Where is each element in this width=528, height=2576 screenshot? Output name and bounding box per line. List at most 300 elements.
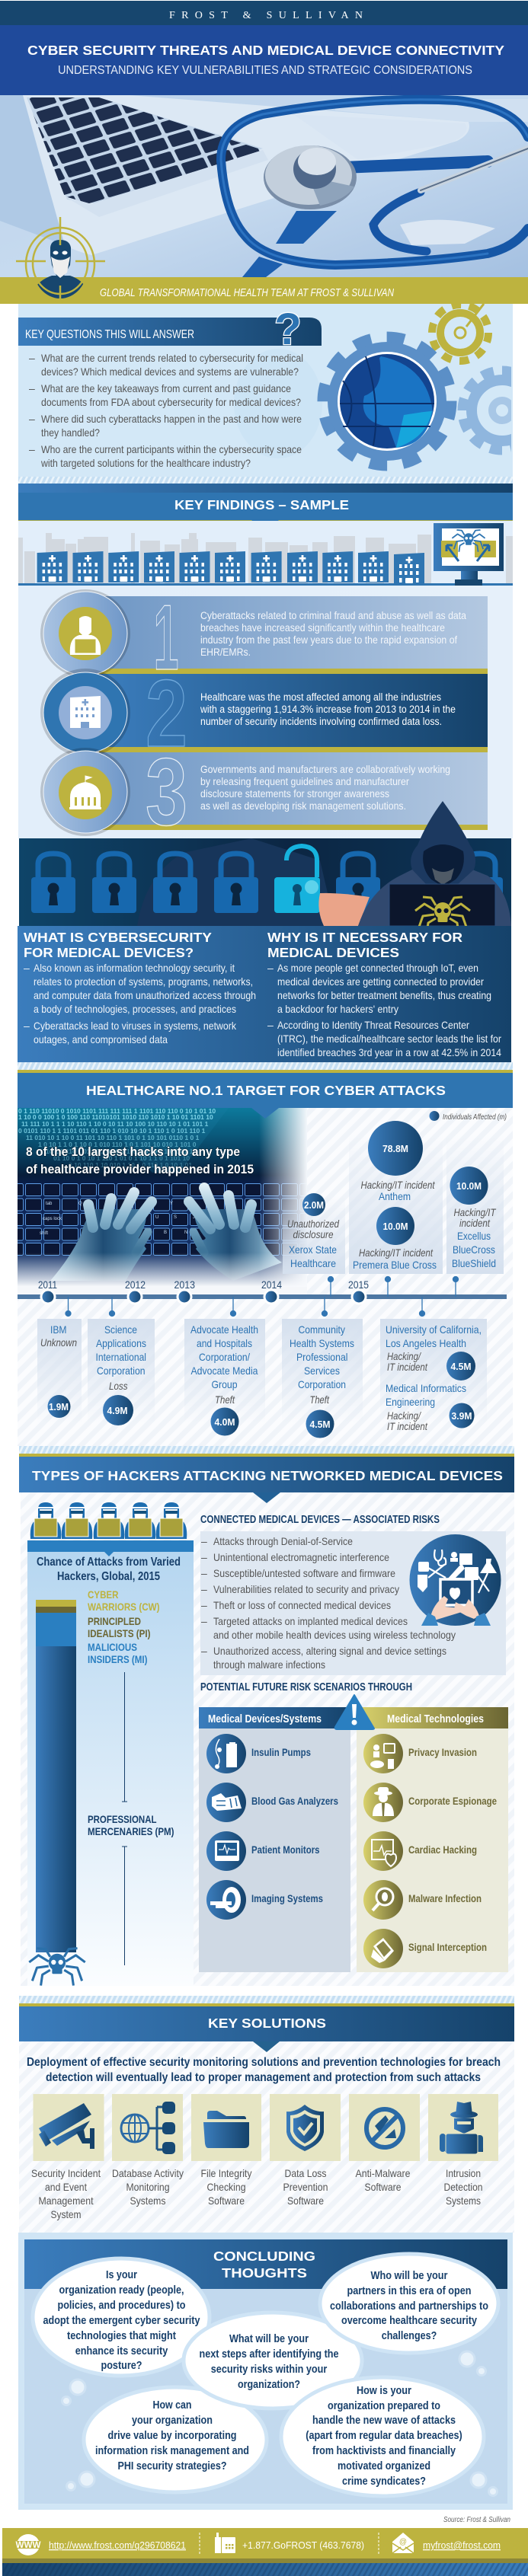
thought: how can your organization: How can bbox=[152, 2399, 192, 2412]
thought: new wave of attacks: crime syndicates? bbox=[342, 2475, 426, 2488]
icon: faint speech bubble bbox=[234, 349, 322, 458]
callout: largest hacks bbox=[26, 1144, 254, 1176]
finding 3: as well as developing risk management solutions. bbox=[200, 800, 406, 812]
breach: Advocate: Theft bbox=[215, 1393, 235, 1406]
binary digits: 0 10 110 1 10 010 1 10 1 0 110 1 0 10 1 01 bbox=[69, 1161, 192, 1169]
finger bbox=[318, 893, 370, 926]
breach: IBM: 1.9M bbox=[49, 1401, 69, 1412]
icon: warning triangle bbox=[335, 1695, 374, 1729]
binary digits: 1 10 0 0 100 1 0 100 110 11010101 1010 110 1010 1 10 01 1101 10 bbox=[18, 1113, 213, 1121]
photo: hands on keyboard: B bbox=[164, 1231, 167, 1235]
link: email: myfrost@frost.com bbox=[423, 2539, 501, 2551]
breach: Science Applications: Applications bbox=[96, 1337, 146, 1349]
panel: risks list: Targeted attacks on implanted medical devices bbox=[213, 1615, 408, 1627]
breach column: Xerox: disclosure bbox=[293, 1228, 334, 1240]
caption: Intrusion bbox=[446, 2167, 481, 2179]
heading: why necessary bbox=[267, 930, 462, 960]
section heading bbox=[18, 1073, 513, 1119]
photo: hands on keyboard: J bbox=[193, 1215, 195, 1220]
list: key questions: Who are the current participants within the cybersecurity space bbox=[41, 443, 302, 455]
heading banner: key questions bbox=[18, 318, 322, 346]
heading bbox=[213, 2249, 315, 2281]
list: key questions: – bbox=[29, 443, 35, 455]
photo: hands on keyboard: tab bbox=[46, 1202, 53, 1206]
icon: hacker circle bbox=[40, 589, 130, 678]
item: insulin pumps: Insulin Pumps bbox=[251, 1746, 311, 1758]
photo: hands on keyboard: Q bbox=[78, 1202, 82, 1206]
breach: Community Health bbox=[282, 1319, 363, 1438]
section heading bbox=[19, 1457, 514, 1503]
breach: Science Applications: Corporation bbox=[97, 1365, 145, 1377]
breach column: Xerox: 2.0M bbox=[304, 1199, 324, 1211]
section heading: TYPES OF HACKERS ATTACKING NETWORKED MEDICAL DEVICES bbox=[32, 1468, 503, 1483]
breach: UCLA and Medical Informatics: IT incident bbox=[387, 1361, 428, 1373]
skyline with hospitals bbox=[18, 521, 513, 586]
thought: next steps: What will be your bbox=[229, 2333, 309, 2345]
icon: light blue gear bbox=[462, 371, 528, 450]
icon: www bbox=[15, 2534, 41, 2555]
list: what is: Cyberattacks lead to viruses in systems, network bbox=[34, 1020, 237, 1032]
breach: IBM: Unknown bbox=[40, 1336, 77, 1349]
breach: Advocate: and Hospitals bbox=[197, 1337, 252, 1349]
item: signal interception: Signal Interception bbox=[408, 1941, 487, 1953]
binary digits: 11 010 10 1 10 0 11 101 10 110 1 101 0 1 10 101 0110 1 0 1 bbox=[26, 1134, 200, 1141]
callout: largest hacks: of healthcare provider happened in 2015 bbox=[26, 1162, 254, 1176]
photo: hands on keyboard: shift bbox=[40, 1231, 48, 1236]
list: key questions: – bbox=[29, 413, 35, 425]
thought: is your organization ready: technologies that might bbox=[67, 2330, 176, 2342]
caption: Database Activity bbox=[112, 2167, 184, 2179]
source note: Source: Frost & Sullivan bbox=[443, 2516, 510, 2524]
icon: envelope bbox=[392, 2533, 414, 2553]
thought: new wave of attacks: from hacktivists and financially bbox=[312, 2445, 456, 2457]
icon: www: WWW bbox=[15, 2539, 41, 2550]
panel: findings bbox=[18, 586, 513, 845]
section heading: key findings: KEY FINDINGS – SAMPLE bbox=[174, 497, 349, 512]
panel: risks list: – bbox=[201, 1535, 207, 1547]
caption: and Event bbox=[45, 2181, 87, 2193]
column: attack chance bbox=[27, 1502, 194, 1986]
breach column: Xerox: Xerox State bbox=[289, 1243, 337, 1256]
timeline: 2014 bbox=[261, 1278, 282, 1291]
item: cardiac hacking: Cardiac Hacking bbox=[408, 1843, 477, 1856]
heading: associated risks: CONNECTED MEDICAL DEVICES — ASSOCIATED RISKS bbox=[200, 1514, 440, 1526]
column: medical devices: Medical Devices/Systems bbox=[208, 1713, 322, 1725]
thought: is your organization ready: policies, and procedures) to bbox=[58, 2300, 186, 2312]
photo: hands on keyboard: U bbox=[155, 1215, 158, 1220]
panel: what is / why bbox=[18, 926, 511, 1062]
thought: is your organization ready: adopt the emergent cyber security bbox=[43, 2315, 200, 2327]
tile: anti-malware bbox=[349, 2094, 420, 2193]
panel: risks list: Unauthorized access, altering signal and device settings bbox=[213, 1645, 446, 1657]
photo: hands on keyboard: S bbox=[174, 1215, 177, 1220]
panel: concluding thoughts bbox=[18, 2233, 513, 2510]
breach: Science Applications: Science bbox=[104, 1323, 137, 1336]
finding 2: 2 bbox=[146, 661, 187, 767]
keyboard bbox=[18, 1183, 307, 1257]
list: why: – bbox=[267, 1019, 274, 1031]
breach: Science Applications: International bbox=[96, 1351, 146, 1363]
breach: UCLA and Medical Informatics: Hacking/ bbox=[387, 1350, 422, 1362]
list: why: networks for better treatment benefits, thus creating bbox=[277, 989, 491, 1001]
column: medical technologies: Medical Technologies bbox=[387, 1713, 484, 1725]
panel: risks list: Susceptible/untested software and firmware bbox=[213, 1567, 395, 1579]
heading: why necessary: MEDICAL DEVICES bbox=[267, 945, 399, 960]
binary digits: 1 0 10 1 1 0 1 10 0 1 010 110 1 0 1 101 10 010 1 101 0 bbox=[38, 1141, 197, 1148]
finding 2: number of security incidents involving confirmed data loss. bbox=[200, 716, 442, 727]
breach column: Excellus: BlueShield bbox=[452, 1257, 496, 1269]
breach: Community Health: 4.5M bbox=[309, 1419, 331, 1430]
padlock: unlocked bright bbox=[274, 846, 320, 913]
breach: Community Health: Theft bbox=[309, 1393, 330, 1406]
section heading: key findings bbox=[18, 484, 513, 531]
caption: Systems bbox=[446, 2195, 481, 2207]
photo: hands on keyboard: Y bbox=[170, 1202, 173, 1206]
heading: why necessary: WHY IS IT NECESSARY FOR bbox=[267, 930, 462, 945]
photo band: padlocks bbox=[19, 801, 511, 934]
list: what is bbox=[24, 962, 256, 1045]
breach: UCLA and Medical Informatics: University of California, bbox=[386, 1323, 482, 1336]
caption bbox=[112, 2167, 184, 2207]
icon: medical devices circle bbox=[410, 1534, 501, 1626]
finding 1: Cyberattacks related to criminal fraud and abuse as well as data bbox=[200, 610, 466, 621]
tile: SIEM camera bbox=[31, 2094, 104, 2220]
caption: Security Incident bbox=[31, 2167, 101, 2179]
subtitle: UNDERSTANDING KEY VULNERABILITIES AND STRATEGIC CONSIDERATIONS bbox=[58, 64, 472, 77]
list: what is: a body of technologies, processes, and practices bbox=[34, 1003, 236, 1015]
icon: envelope: @ bbox=[399, 2538, 407, 2546]
list: key questions: they handled? bbox=[41, 426, 100, 439]
bar labels: INSIDERS (MI) bbox=[88, 1653, 148, 1665]
bar labels: PROFESSIONAL bbox=[88, 1813, 157, 1825]
tile: database network bbox=[112, 2094, 184, 2207]
finding 3: disclosure statements for stronger awareness bbox=[200, 788, 389, 800]
list: key questions: with targeted solutions for the healthcare industry? bbox=[40, 457, 251, 469]
panel: risks list: – bbox=[201, 1567, 207, 1579]
list: why: medical devices are getting connected to provider bbox=[277, 975, 484, 988]
list: why: (ITRC), the medical/healthcare sector leads the list for bbox=[277, 1033, 501, 1045]
decorative bubbles bbox=[62, 2351, 497, 2496]
thought: how can your organization: your organization bbox=[132, 2415, 213, 2427]
breach: Community Health: Health Systems bbox=[290, 1337, 354, 1349]
breach column: Excellus bbox=[446, 1135, 504, 1274]
item: blood gas analyzers bbox=[206, 1783, 338, 1822]
breach: Advocate bbox=[184, 1319, 265, 1436]
breach: UCLA and Medical Informatics: Los Angeles Health bbox=[386, 1337, 466, 1349]
header bar: Frost & Sullivan logo bbox=[0, 1, 528, 25]
thought: is your organization ready: enhance its security bbox=[75, 2345, 168, 2357]
binary digits: 10 1 0 110 1 01 10 1 0 10 1 101 1 0 10 1 1 0 1 01 1 bbox=[46, 1148, 194, 1155]
breach column: Excellus: BlueCross bbox=[453, 1243, 495, 1256]
panel: risks list: – bbox=[201, 1645, 207, 1657]
footer bbox=[2, 2528, 528, 2576]
list: key questions: – bbox=[29, 382, 35, 394]
bar labels: MALICIOUS bbox=[88, 1641, 137, 1653]
caption: Management bbox=[38, 2195, 94, 2207]
icon: hacker in target crosshair bbox=[16, 217, 105, 306]
heading: what is cybersecurity: FOR MEDICAL DEVICES? bbox=[24, 945, 194, 960]
breach: UCLA and Medical Informatics: IT incident bbox=[387, 1420, 428, 1432]
breach column: Anthem and Premera: Hacking/IT incident bbox=[359, 1247, 434, 1259]
tile: folder bbox=[191, 2094, 261, 2207]
caption: Prevention bbox=[283, 2181, 328, 2193]
breach column: Xerox bbox=[283, 1193, 345, 1274]
timeline: 2012 bbox=[125, 1278, 146, 1291]
breach: UCLA and Medical Informatics: 3.9M bbox=[451, 1410, 472, 1422]
hospital row bbox=[37, 551, 424, 584]
chart heading bbox=[37, 1556, 181, 1583]
bar labels: PRINCIPLED bbox=[88, 1615, 141, 1627]
caption: File Integrity bbox=[201, 2167, 251, 2179]
photo: hands on keyboard bbox=[18, 1107, 307, 1296]
finding 3: 3 bbox=[146, 739, 187, 845]
list: what is: – bbox=[24, 1020, 30, 1032]
bar labels: CYBER bbox=[88, 1588, 119, 1601]
finding 2 bbox=[99, 661, 488, 767]
breach: Community Health: Professional bbox=[296, 1351, 347, 1363]
caption bbox=[31, 2167, 101, 2220]
finding 1: industry from the past few years due to the rapid expansion of bbox=[200, 634, 457, 646]
list: what is: outages, and compromised data bbox=[34, 1033, 168, 1045]
breach column: Excellus: 10.0M bbox=[456, 1180, 482, 1192]
finding 1: breaches have increased significantly within the healthcare bbox=[200, 622, 445, 634]
thought: new wave of attacks: motivated organized bbox=[338, 2460, 430, 2472]
panel: risks list: Unintentional electromagnetic interference bbox=[213, 1551, 389, 1563]
thought: partners: partners in this era of open bbox=[347, 2285, 471, 2297]
breach: Advocate: Advocate Media bbox=[190, 1365, 258, 1377]
breach: UCLA and Medical Informatics: Engineering bbox=[386, 1396, 435, 1408]
caption: Software bbox=[364, 2181, 402, 2193]
hacker row bbox=[30, 1502, 187, 1539]
panel: risks list: – bbox=[201, 1599, 207, 1611]
thought: next steps: next steps after identifying the bbox=[200, 2348, 338, 2361]
thought: new wave of attacks: How is your bbox=[357, 2385, 411, 2397]
heading: what is cybersecurity: WHAT IS CYBERSECURITY bbox=[24, 930, 212, 945]
thought: partners: challenges? bbox=[382, 2330, 437, 2342]
list: what is: and computer data from unauthorized access through bbox=[34, 989, 256, 1001]
item: privacy invasion: Privacy Invasion bbox=[408, 1746, 477, 1758]
breach: IBM: IBM bbox=[50, 1323, 67, 1336]
icon: globe gear bbox=[324, 338, 450, 464]
list: key questions: Where did such cyberattacks happen in the past and how were bbox=[41, 413, 302, 425]
panel: risks list bbox=[200, 1531, 506, 1675]
panel: risks list: – bbox=[201, 1551, 207, 1563]
breach: Science Applications: Loss bbox=[109, 1380, 128, 1392]
chart heading: Hackers, Global, 2015 bbox=[57, 1570, 160, 1583]
breach: Science Applications: 4.9M bbox=[107, 1405, 128, 1416]
breach: UCLA and Medical Informatics: 4.5M bbox=[451, 1361, 471, 1372]
panel: risks list: through malware infections bbox=[213, 1658, 325, 1671]
caption: Detection bbox=[443, 2181, 483, 2193]
panel: key questions bbox=[18, 304, 528, 477]
heading: what is cybersecurity bbox=[24, 930, 212, 960]
heading banner: key questions: KEY QUESTIONS THIS WILL ANSWER bbox=[25, 328, 194, 341]
thought: how can your organization: drive value by incorporating bbox=[108, 2430, 236, 2442]
item: blood gas analyzers: Blood Gas Analyzers bbox=[251, 1795, 338, 1807]
item: signal interception bbox=[363, 1929, 487, 1968]
icon: phone bbox=[215, 2533, 235, 2553]
panel: risks list: Theft or loss of connected medical devices bbox=[213, 1599, 391, 1611]
binary digits: 0 0101 110 1 1 1101 011 01 110 1 010 10 10 1 110 1 0 101 110 1 bbox=[18, 1127, 206, 1135]
caption: Data Loss bbox=[285, 2167, 326, 2179]
list: key questions: devices? Which medical devices and systems are vulnerable? bbox=[41, 365, 299, 378]
icon: hospital circle bbox=[40, 669, 130, 757]
list: what is: relates to protection of systems, programs, networks, bbox=[34, 975, 253, 988]
panel: risks list: Attacks through Denial-of-Service bbox=[213, 1535, 353, 1547]
thought: is your organization ready bbox=[33, 2258, 210, 2376]
thought: how can your organization: information risk management and bbox=[95, 2445, 249, 2457]
icon: spider bbox=[29, 1949, 85, 1986]
caption: Systems bbox=[130, 2195, 166, 2207]
thought: new wave of attacks bbox=[281, 2377, 484, 2496]
heading: future risk scenarios: POTENTIAL FUTURE RISK SCENARIOS THROUGH bbox=[200, 1681, 412, 1693]
list: why: As more people get connected through IoT, even bbox=[277, 962, 478, 974]
breach: Community Health: Corporation bbox=[298, 1378, 346, 1390]
breach column: Xerox: Unauthorized bbox=[287, 1218, 340, 1230]
phone number: +1.877.GoFROST (463.7678) bbox=[242, 2539, 364, 2551]
breach column: Anthem and Premera: 10.0M bbox=[382, 1221, 408, 1232]
breach column: Anthem and Premera: Hacking/IT incident bbox=[361, 1179, 435, 1191]
photo: hands on keyboard: caps lock bbox=[43, 1217, 62, 1221]
breach column: Excellus: Hacking/IT bbox=[454, 1206, 497, 1218]
left hand bbox=[50, 1192, 152, 1281]
item: patient monitors bbox=[206, 1831, 320, 1871]
breach: Science Applications bbox=[88, 1319, 155, 1425]
timeline: 2015 bbox=[348, 1278, 369, 1291]
link: website: http://www.frost.com/q296708621 bbox=[49, 2539, 186, 2551]
right hand bbox=[189, 1188, 282, 1281]
breach: UCLA and Medical Informatics: Medical Informatics bbox=[386, 1382, 466, 1394]
timeline bbox=[18, 1276, 507, 1316]
breach column: Excellus: Excellus bbox=[457, 1230, 491, 1242]
hacker in hood with laptop bbox=[358, 801, 511, 934]
caption bbox=[201, 2167, 251, 2207]
item: corporate espionage: Corporate Espionage bbox=[408, 1795, 497, 1807]
callout: largest hacks: 8 of the 10 largest hacks into any type bbox=[26, 1144, 240, 1159]
finding 1 bbox=[99, 586, 488, 689]
panel: risks list: and other mobile health devices using wireless technology bbox=[213, 1629, 456, 1641]
thought: next steps: security risks within your bbox=[211, 2364, 328, 2376]
thought: partners: overcome healthcare security bbox=[341, 2315, 477, 2327]
list: key questions: What are the key takeaways from current and past guidance bbox=[41, 382, 291, 394]
statement bbox=[27, 2056, 501, 2084]
panel: healthcare target bbox=[18, 1073, 513, 1446]
section heading bbox=[19, 2006, 514, 2052]
caption bbox=[355, 2167, 411, 2193]
breach column: Xerox: Healthcare bbox=[290, 1257, 336, 1269]
gold band: team label bbox=[0, 277, 528, 304]
icon: government circle bbox=[40, 748, 130, 836]
thought: is your organization ready: posture? bbox=[101, 2360, 142, 2372]
caption: Checking bbox=[207, 2181, 245, 2193]
stacked bar bbox=[36, 1600, 76, 1952]
thought: is your organization ready: Is your bbox=[106, 2269, 137, 2281]
breach: Advocate: Group bbox=[212, 1378, 238, 1390]
item: privacy invasion bbox=[363, 1734, 477, 1773]
item: imaging systems bbox=[206, 1880, 323, 1920]
breach column: Anthem and Premera bbox=[349, 1121, 443, 1274]
list: why: According to Identity Threat Resources Center bbox=[277, 1019, 469, 1031]
caption: Software bbox=[287, 2195, 324, 2207]
list: what is: Also known as information technology security, it bbox=[34, 962, 235, 974]
icon: question mark: ? bbox=[274, 305, 302, 354]
thought: how can your organization bbox=[84, 2387, 267, 2492]
list: key questions: documents from FDA about cybersecurity for medical devices? bbox=[41, 396, 301, 408]
list: why: identified breaches 3rd year in a row at 42.5% in 2014 bbox=[277, 1046, 501, 1058]
caption: Monitoring bbox=[126, 2181, 169, 2193]
thought: partners: Who will be your bbox=[370, 2270, 448, 2282]
title: CYBER SECURITY THREATS AND MEDICAL DEVICE CONNECTIVITY bbox=[27, 43, 504, 58]
breach: UCLA and Medical Informatics bbox=[380, 1319, 487, 1432]
tile: shield bbox=[270, 2094, 341, 2207]
bar labels: MERCENARIES (PM) bbox=[88, 1825, 174, 1837]
binary digits: 01 10 0 1 0 10 1 110 1 01 0 1 10 1 1 0 1 101 10 bbox=[53, 1154, 190, 1162]
breach: Community Health: Community bbox=[299, 1323, 345, 1336]
finding 1: 1 bbox=[154, 586, 178, 689]
timeline: 2013 bbox=[174, 1278, 195, 1291]
finding 2: Healthcare was the most affected among all the industries bbox=[200, 691, 441, 703]
column: medical technologies bbox=[357, 1707, 508, 1972]
caption bbox=[283, 2167, 328, 2207]
breach: IBM bbox=[37, 1319, 82, 1424]
panel: key solutions bbox=[19, 2006, 514, 2233]
caption: Software bbox=[208, 2195, 245, 2207]
breach: Advocate: Advocate Health bbox=[190, 1323, 258, 1336]
finding 3: by releasing frequent guidelines and manufacturer bbox=[200, 776, 409, 787]
gold band: team label: GLOBAL TRANSFORMATIONAL HEALTH TEAM AT FROST & SULLIVAN bbox=[100, 287, 394, 299]
heading: THOUGHTS bbox=[222, 2265, 307, 2281]
bar labels: WARRIORS (CW) bbox=[88, 1601, 160, 1613]
thought: next steps bbox=[184, 2313, 362, 2408]
breach: UCLA and Medical Informatics: Hacking/ bbox=[387, 1409, 422, 1422]
breach column: Anthem and Premera: Anthem bbox=[379, 1190, 411, 1202]
item: imaging systems: Imaging Systems bbox=[251, 1892, 323, 1904]
caption bbox=[443, 2167, 483, 2207]
panel: risks list: – bbox=[201, 1615, 207, 1627]
item: cardiac hacking bbox=[363, 1831, 477, 1871]
caption: Anti-Malware bbox=[355, 2167, 411, 2179]
binary digits: 11 111 10 1 1 1 10 110 1 10 0 10 11 10 100 10 110 10 1 01 101 1 bbox=[21, 1120, 209, 1128]
icon: gold gear bbox=[432, 304, 488, 361]
heading: CONCLUDING bbox=[213, 2249, 315, 2264]
item: malware infection: Malware Infection bbox=[408, 1892, 482, 1904]
bar labels bbox=[88, 1588, 174, 1837]
thought: new wave of attacks: handle the new wave of attacks bbox=[312, 2415, 456, 2427]
list: why: a backdoor for hackers' entry bbox=[277, 1003, 398, 1015]
panel: types of hackers bbox=[19, 1457, 514, 1986]
breach: Advocate: Corporation/ bbox=[199, 1351, 250, 1363]
legend: individuals affected: Individuals Affected (m) bbox=[443, 1113, 507, 1122]
list: key questions: – bbox=[29, 352, 35, 364]
caption: System bbox=[50, 2208, 81, 2220]
header bar: Frost & Sullivan logo: FROST & SULLIVAN bbox=[169, 10, 363, 21]
finding 2: with a staggering 1,914.3% increase from 2013 to 2014 in the bbox=[200, 704, 456, 715]
finding 3 bbox=[99, 739, 488, 845]
title block bbox=[0, 25, 528, 95]
breach column: Excellus: incident bbox=[459, 1217, 491, 1229]
stethoscope bbox=[221, 100, 528, 265]
panel: risks list: Vulnerabilities related to security and privacy bbox=[213, 1583, 399, 1595]
thought: new wave of attacks: organization prepared to bbox=[328, 2400, 440, 2412]
thought: partners bbox=[320, 2254, 498, 2353]
section heading: HEALTHCARE NO.1 TARGET FOR CYBER ATTACKS bbox=[86, 1083, 446, 1098]
legend: individuals affected bbox=[430, 1111, 507, 1122]
icon: monitor with spider bbox=[434, 523, 504, 586]
photo: hands on keyboard: N bbox=[184, 1231, 187, 1235]
breach: Advocate: 4.0M bbox=[215, 1416, 235, 1428]
binary digits bbox=[18, 1107, 216, 1169]
column: medical devices bbox=[199, 1707, 350, 1972]
